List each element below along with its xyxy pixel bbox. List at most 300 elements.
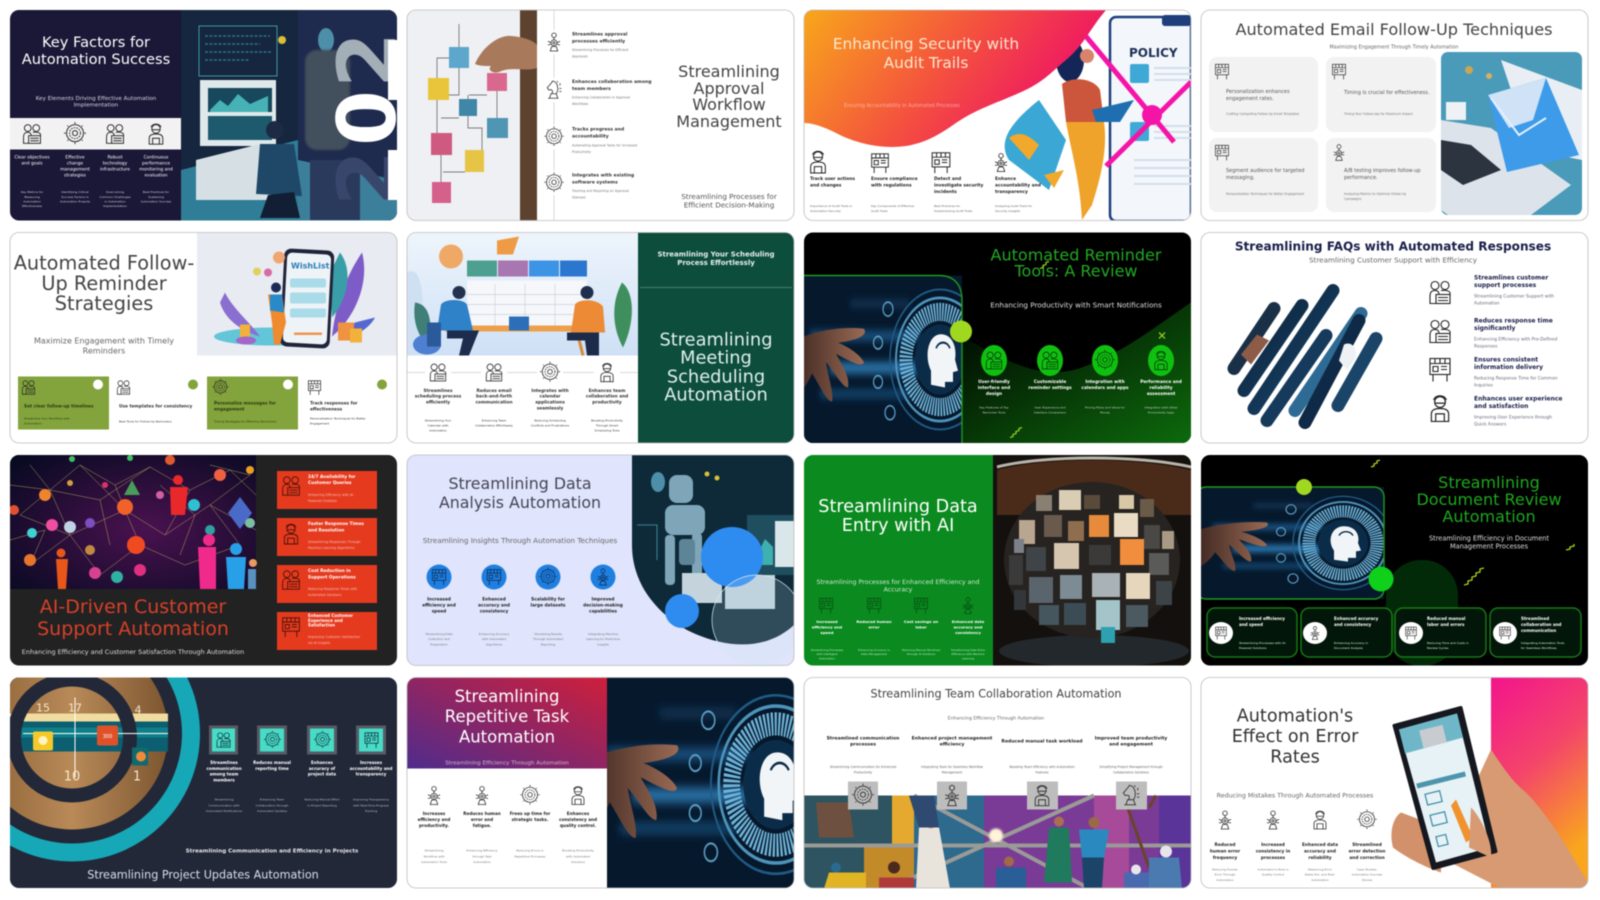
- tile: track: Track responses for: [310, 400, 358, 406]
- subtitle: Enhancing Efficiency and Customer Satisfaction Through Automation: [22, 648, 244, 656]
- card: timing: Timing Your Follow-Ups for Maximum Impact: [1343, 112, 1414, 116]
- item: efficiency: Collection and: [428, 637, 450, 641]
- item: scalability: Reporting: [541, 642, 555, 646]
- item: user experience: [1431, 396, 1562, 428]
- subtitle: Streamlining Processes for Enhanced Efficiency and: [816, 579, 980, 586]
- item: consistency: processes: [1261, 855, 1286, 861]
- item: user experience: Quick Answers: [1474, 422, 1507, 428]
- item: integration: software systems: [572, 180, 618, 186]
- item: incidents: [932, 153, 983, 213]
- tile: timelines: Set clear follow-up timelines: [24, 404, 94, 410]
- item: response time: [1430, 318, 1558, 350]
- item: change management: [60, 122, 91, 204]
- title: Streamlining Data: [818, 497, 978, 517]
- panel: Streamlining Project Updates Automation: [0, 606, 397, 888]
- panel: Streamlining Data Entry with AI: [804, 455, 1191, 667]
- photo: hand holding phone with checklist: [1391, 708, 1588, 888]
- item: consistency: with Automated: [566, 854, 590, 858]
- card: testing: A/B testing improves follow-up: [1344, 168, 1421, 174]
- tile: collaboration: Integrating Automation Tools: [1521, 641, 1565, 645]
- photo: AI head: [606, 677, 794, 888]
- item: consistency: information delivery: [1474, 364, 1543, 371]
- image: concentric timeline circles: 300: [103, 734, 112, 740]
- item: calendars: [1081, 345, 1129, 414]
- item: compliance: [871, 154, 918, 213]
- item: speed: speed: [820, 630, 834, 635]
- item: clear objectives: Key Metrics for: [21, 190, 44, 194]
- item: incidents: Best Practices for: [934, 204, 961, 208]
- item: efficiency: speed: [432, 608, 446, 614]
- item: clear objectives: Automation: [23, 200, 41, 204]
- item: accuracy: accuracy and: [478, 602, 510, 608]
- item: data accuracy: [1302, 811, 1338, 882]
- item: scalability: large datasets: [530, 602, 566, 608]
- item: communication: Streamlining: [214, 798, 234, 802]
- image: concentric timeline circles: 1: [133, 770, 141, 784]
- item: collaboration: team members: [572, 86, 611, 92]
- tile: availability: [277, 471, 377, 509]
- item: efficiency: productivity.: [419, 823, 449, 828]
- item: reliability: [1140, 345, 1182, 414]
- item: response time: Responses: [1474, 344, 1498, 350]
- title: Management: [676, 112, 782, 131]
- item: scalability: Through Automated: [532, 637, 563, 641]
- card: personalization: [1209, 57, 1318, 132]
- item: collaboration: Workflows: [572, 102, 589, 106]
- item: efficiency: Streamlining: [424, 848, 444, 852]
- item: interface: design: [986, 391, 1002, 397]
- item: efficiency: Streamlining Data: [425, 632, 453, 636]
- title: Repetitive Task: [445, 707, 570, 726]
- panel: AI-Driven Customer Support Automation: [9, 455, 397, 666]
- item: consistency: quality control.: [560, 823, 596, 828]
- item: team productivity: productivity: [592, 400, 622, 406]
- item: data accuracy: reliability: [1308, 855, 1332, 861]
- panel: Streamlining Data Analysis Automation: [407, 455, 802, 666]
- column: communication: [827, 736, 899, 810]
- item: reporting time: reporting time: [255, 766, 289, 771]
- item: calendar apps: [531, 362, 570, 428]
- item: accountability: Tracking: [364, 809, 377, 813]
- image: concentric timeline circles: 10: [64, 770, 80, 784]
- title: Scheduling: [667, 366, 765, 388]
- tile: response times: Machine Learning Algorithms: [308, 546, 355, 550]
- item: error detection: Case Studies:: [1357, 868, 1377, 872]
- item: free time: strategic tasks.: [512, 817, 549, 822]
- title: Streamlining: [660, 330, 772, 350]
- column: communication: Productivity: [854, 770, 872, 774]
- item: data accuracy: Automation: [1311, 878, 1329, 882]
- item: settings: [1028, 345, 1072, 414]
- item: calendar apps: applications: [535, 400, 565, 406]
- item: team productivity: Boosting Productivity: [591, 418, 623, 422]
- column: workload: Features: [1035, 770, 1049, 774]
- column: workload: [1001, 738, 1083, 810]
- item: technology infrastructure: Implementation: [103, 204, 127, 208]
- subtitle: Streamlining Your Scheduling: [657, 250, 775, 258]
- tile: efficiency: Increased efficiency: [1239, 616, 1285, 621]
- item: efficiency: Increased: [427, 596, 451, 602]
- tile: customer experience: [277, 612, 377, 650]
- item: reliability: Performance and: [1140, 379, 1182, 385]
- item: error detection: and correction: [1349, 855, 1385, 861]
- item: settings: Interface Comparison: [1034, 410, 1066, 414]
- item: scheduling: Streamlining Your: [425, 418, 452, 422]
- item: email: communication: [475, 400, 513, 406]
- tile: collaboration: for Seamless Workflows: [1521, 646, 1557, 650]
- item: free time: Reducing Errors in: [516, 848, 544, 852]
- panel: Key Factors for Automation Success: [10, 10, 414, 220]
- illustration: woman and policy phone: POLICY: [1129, 46, 1178, 60]
- photo: engineer at monitor: [181, 10, 397, 220]
- item: consistency: [1256, 811, 1290, 876]
- item: compliance: Key Components of Effective: [871, 204, 914, 208]
- decorative squiggles: [1371, 460, 1574, 585]
- card: testing: Campaigns: [1344, 197, 1362, 201]
- icon band: [10, 118, 181, 150]
- item: interface: interface and: [978, 385, 1010, 391]
- item: support processes: support processes: [1474, 282, 1537, 289]
- item: human error: [1210, 811, 1241, 882]
- item: accuracy: [478, 564, 510, 646]
- item: accountability: accountability and: [995, 182, 1041, 188]
- item: user actions: and changes: [810, 182, 842, 188]
- card: segmentation: Segment audience for targeted: [1226, 168, 1304, 174]
- column: project management: Enhanced project management: [912, 736, 993, 742]
- item: data accuracy: Rates Pre- and Post-: [1305, 872, 1335, 876]
- tile: availability: Powered Chatbots: [308, 499, 337, 503]
- title: Tools: A Review: [1013, 262, 1138, 280]
- tile: collaboration: Streamlined: [1521, 616, 1549, 621]
- tile: efficiency: Streamlining Processes with AI-: [1239, 641, 1286, 645]
- title: Automated Follow-: [14, 252, 194, 274]
- item: clear objectives: and goals: [21, 160, 43, 166]
- title: Strategies: [55, 292, 153, 315]
- item: human error: Data Management: [861, 652, 888, 656]
- item: accountability: Analyzing Audit Trails for: [995, 204, 1033, 208]
- item: consistency: Increased: [1261, 842, 1285, 848]
- item: efficiency: efficiency and: [418, 817, 450, 822]
- item: error detection: Automation Success: [1352, 872, 1383, 876]
- item: incidents: Detect and: [934, 176, 961, 182]
- item: data accuracy: accuracy and: [1304, 848, 1336, 854]
- item: efficiency: Workflow with: [423, 854, 445, 858]
- item: approval: Approvals: [572, 54, 588, 58]
- tile: accuracy: Enhancing Accuracy in: [1334, 641, 1368, 645]
- panel: Streamlining Approval Workflow Management: [407, 10, 794, 220]
- item: calendar apps: seamlessly: [537, 406, 564, 412]
- card: timing: [1326, 57, 1436, 132]
- item: interface: Key Features of Top: [979, 406, 1009, 410]
- title: Audit Trails: [884, 54, 968, 72]
- item: settings: Customizable: [1034, 379, 1066, 385]
- item: approval: [545, 30, 629, 58]
- tile: customer experience: Satisfaction: [308, 622, 335, 628]
- panel: Enhancing Security with Audit Trails: [804, 10, 1191, 221]
- column: project management: [912, 736, 993, 810]
- item: speed: efficiency and: [812, 624, 842, 630]
- item: continuous monitoring: Best Practices for: [143, 190, 170, 194]
- item: project data: Enhances: [311, 760, 334, 765]
- card: personalization: Crafting Compelling Follow-Up Email Templates: [1226, 112, 1299, 116]
- item: human error: Error Through: [1215, 872, 1235, 876]
- column: productivity: Simplifying Project Management through: [1099, 765, 1163, 769]
- item: change management: Automation Projects: [60, 200, 91, 204]
- item: calendars: calendars and apps: [1081, 385, 1129, 391]
- item: data accuracy: Transforming Data Entry: [950, 648, 985, 652]
- subtitle: Enhancing Productivity with Smart Notifications: [990, 300, 1162, 310]
- item: error detection: Stories: [1362, 878, 1373, 882]
- column: project management: Management: [942, 770, 963, 774]
- tile: personalize: Personalize messages for: [214, 400, 277, 406]
- item: change management: Effective: [65, 154, 85, 160]
- item: project data: in Project Reporting: [307, 804, 337, 808]
- rotated year numerals: [334, 38, 398, 201]
- diagonal photo strips: [1234, 290, 1376, 422]
- item: human error: human error: [1210, 848, 1241, 854]
- item: accuracy: Enhancing Accuracy: [479, 632, 509, 636]
- item: interface: [978, 345, 1010, 414]
- item: user experience: Enhances user experience: [1474, 396, 1562, 402]
- item: team productivity: [586, 362, 628, 432]
- item: data accuracy: [950, 598, 985, 660]
- item: human error: Enhancing Accuracy in: [858, 648, 890, 652]
- item: human error: Reduces human: [463, 811, 501, 816]
- tile: customer experience: Enhanced Customer: [308, 613, 353, 618]
- item: change management: Identifying Critical: [61, 190, 89, 194]
- panel: Streamlining Repetitive Task Automation: [407, 624, 893, 900]
- item: project data: project data: [308, 772, 336, 776]
- item: decisions: Insights: [597, 642, 609, 646]
- photo frame: AI head: [760, 234, 1030, 486]
- item: user actions: [810, 151, 855, 213]
- item: consistency: Boosting Productivity: [562, 848, 594, 852]
- item: decisions: Learning for Predictive: [586, 637, 620, 641]
- subtitle: Streamlining Insights Through Automation Techniques: [423, 536, 618, 545]
- tile: cost reduction: Automated Solutions: [308, 593, 342, 597]
- tile: timelines: [18, 376, 109, 430]
- item: efficiency: Increases: [423, 811, 446, 816]
- item: technology infrastructure: Common Challenges: [99, 195, 131, 199]
- item: user actions: Automation Security: [810, 209, 841, 213]
- title: Streamlining Team Collaboration Automation: [870, 688, 1122, 700]
- item: human error: error: [868, 624, 880, 630]
- title: Automation: [664, 384, 768, 406]
- tile: personalize: engagement: [214, 406, 244, 412]
- item: email: Reduces email: [476, 388, 512, 394]
- subtitle: Maximizing Engagement Through Timely Automation: [1330, 44, 1458, 50]
- item: accuracy: Algorithms: [486, 642, 503, 646]
- tile: availability: Customer Queries: [308, 480, 352, 486]
- subtitle: Streamlining Efficiency in Document: [1429, 534, 1549, 542]
- item: human error: through Task: [472, 854, 492, 858]
- subtitle: Streamlining Processes for: [681, 192, 777, 201]
- tile: labor: Reduced manual: [1427, 616, 1466, 621]
- image: concentric timeline circles: [0, 606, 200, 862]
- item: user experience: and satisfaction: [1474, 403, 1528, 410]
- tile: availability: Enhancing Efficiency with AI-: [308, 493, 354, 497]
- subtitle: Efficient Decision-Making: [684, 200, 774, 210]
- item: efficiency: [422, 564, 456, 646]
- subtitle: Management Processes: [1450, 542, 1529, 550]
- column: workload: Boosting Team Efficiency with Automation: [1009, 765, 1075, 769]
- item: human error: Enhancing Efficiency: [466, 848, 498, 852]
- column: productivity: and engagement: [1109, 742, 1154, 748]
- tile: templates: Use templates for consistency: [119, 404, 193, 410]
- subtitle: Maximize Engagement with Timely: [34, 336, 174, 346]
- panel: Streamlining FAQs with Automated Responses: [1201, 232, 1588, 443]
- illustration: woman and wishlist phone: WishList: [291, 262, 330, 270]
- item: tracking: Productivity: [572, 150, 591, 154]
- item: scalability: Visualizing Results: [534, 632, 562, 636]
- illustration: two people scheduling: [407, 232, 638, 356]
- item: integration: Statuses: [572, 196, 586, 200]
- subtitle: Implementation: [74, 102, 119, 108]
- item: reporting time: Enhancing Team: [260, 798, 284, 802]
- item: reliability: reliability: [1149, 385, 1173, 391]
- item: data accuracy: Enhanced data: [1302, 842, 1338, 848]
- item: clear objectives: Clear objectives: [14, 154, 50, 160]
- item: consistency: Reducing Response Time for Common: [1474, 376, 1558, 382]
- title: Automated Reminder: [991, 246, 1162, 264]
- item: reporting time: Collaboration through: [256, 804, 288, 808]
- item: efficiency: Automation Tools: [421, 860, 447, 864]
- tile: availability: 24/7 Availability for: [308, 474, 356, 480]
- panel: Streamlining Document Review Automation: [1163, 455, 1588, 666]
- item: response time: significantly: [1474, 325, 1516, 332]
- item: reporting time: Automated Updates: [257, 809, 287, 813]
- item: clear objectives: Effectiveness: [22, 204, 42, 208]
- item: collaboration: [545, 78, 652, 106]
- item: efficiency: [418, 786, 450, 864]
- title: Automated Email Follow-Up Techniques: [1235, 20, 1553, 39]
- item: scheduling: Calendar with: [428, 424, 449, 428]
- column: productivity: Collaborative Solutions: [1113, 770, 1149, 774]
- item: collaboration: Enhancing Collaboration in Approval: [572, 96, 630, 100]
- item: communication: Communication with: [209, 804, 240, 808]
- tile: cost reduction: [277, 565, 377, 603]
- rotated year numerals: 2: [321, 32, 414, 88]
- tile: templates: Best Tools for Follow-Up Reminders: [119, 420, 172, 424]
- title: Streamlining: [678, 62, 780, 81]
- image: robot with blue circles: [632, 455, 802, 665]
- gradient swoosh: [804, 10, 1106, 147]
- tile: accuracy: and consistency: [1334, 622, 1372, 627]
- subtitle: Streamlining Communication and Efficiency in Projects: [186, 848, 359, 854]
- column: productivity: [1095, 736, 1167, 810]
- panel: Streamlining Meeting Scheduling Automation: [407, 232, 794, 443]
- tile: accuracy: Enhanced accuracy: [1334, 616, 1379, 621]
- item: continuous monitoring: evaluation: [144, 172, 168, 178]
- tile: cost reduction: Reducing Response Times with: [308, 587, 357, 591]
- tile: track: Engagement: [310, 422, 330, 426]
- tile: labor: [1395, 608, 1486, 657]
- side panel: [638, 232, 794, 443]
- tile: timelines: Automation: [24, 422, 42, 426]
- item: scalability: [530, 564, 566, 646]
- item: response time: Enhancing Efficiency with Pre-Defined: [1474, 336, 1558, 342]
- photo: flowchart on paper: [407, 10, 537, 220]
- item: calendar apps: Reducing Scheduling: [534, 418, 566, 422]
- tile: accuracy: [1301, 608, 1392, 657]
- item: technology infrastructure: [99, 125, 131, 208]
- tile: efficiency: Powered Solutions: [1239, 646, 1267, 650]
- item: human error: [856, 598, 892, 656]
- item: human error: fatigue.: [473, 823, 492, 828]
- tile: track: Personalization Techniques for Better: [310, 416, 367, 420]
- item: human error: Reduced human: [856, 619, 892, 624]
- tile: response times: [277, 518, 377, 556]
- card: segmentation: Personalization Techniques for Better Engagement: [1226, 192, 1305, 196]
- item: continuous monitoring: Sustaining: [148, 195, 164, 199]
- item: consistency: Quality Control: [1262, 872, 1284, 876]
- item: reliability: assessment: [1147, 391, 1175, 397]
- title: Automation Success: [22, 51, 170, 68]
- tile: labor: Reducing Time and Costs in: [1427, 641, 1469, 645]
- item: tracking: [544, 125, 637, 154]
- tile: labor: Review Cycles: [1427, 646, 1449, 650]
- item: data accuracy: Measuring Error: [1308, 868, 1333, 872]
- item: continuous monitoring: Automation Success: [141, 200, 172, 204]
- item: human error: [463, 786, 501, 864]
- item: labor savings: Cost savings on: [904, 619, 938, 624]
- panel: Automated Reminder Tools: A Review: [760, 232, 1191, 486]
- item: human error: error and: [471, 817, 493, 822]
- item: labor savings: through AI Solutions: [907, 652, 936, 656]
- item: error detection: [1349, 810, 1385, 882]
- item: scheduling: Automation: [429, 428, 447, 432]
- item: tracking: Automating Approval Tasks for Increased: [572, 144, 637, 148]
- title: Effect on Error: [1232, 727, 1359, 747]
- panel: Automation's Effect on Error Rates: [1201, 678, 1588, 888]
- item: accountability: accountability and: [350, 766, 392, 771]
- tile: templates: [110, 376, 201, 430]
- item: consistency: consistency in: [1256, 848, 1290, 854]
- item: reliability: Integration with Other: [1144, 406, 1178, 410]
- item: accountability: Enhance: [995, 176, 1016, 182]
- gradient side band: [1491, 678, 1588, 888]
- card: personalization: Personalization enhances: [1226, 89, 1290, 95]
- column: project management: efficiency: [940, 742, 964, 748]
- column: workload: Reduced manual task workload: [1001, 738, 1083, 744]
- item: consistency: [559, 787, 597, 864]
- item: data accuracy: Enhanced data: [952, 619, 985, 624]
- item: calendar apps: Conflicts and Frustrations: [531, 424, 570, 428]
- title: Support Automation: [37, 618, 229, 640]
- card: testing: performance.: [1344, 175, 1378, 181]
- item: calendar apps: calendar: [540, 394, 561, 400]
- item: scheduling: scheduling process: [415, 394, 462, 400]
- item: error detection: error detection: [1349, 848, 1385, 854]
- tile: timelines: Streamline Your Workflow with: [24, 416, 70, 420]
- item: integration: [544, 171, 634, 200]
- image: data blocks cylinder: [993, 455, 1191, 667]
- item: change management: strategies: [64, 172, 87, 178]
- item: accountability: transparency: [356, 772, 387, 776]
- rotated year numerals: 2: [321, 150, 414, 206]
- subtitle: Accuracy: [884, 586, 913, 594]
- title: Automation: [1442, 507, 1536, 526]
- column: communication: processes: [850, 742, 876, 748]
- item: reliability: Productivity Apps: [1148, 410, 1175, 414]
- item: consistency: Solutions: [571, 860, 585, 864]
- item: labor savings: [902, 598, 940, 656]
- item: scheduling: Streamlines: [423, 388, 453, 394]
- item: reporting time: [253, 726, 292, 813]
- item: accountability: Improving Transparency: [353, 798, 389, 802]
- item: data accuracy: consistency: [955, 630, 981, 635]
- item: email: [475, 362, 513, 428]
